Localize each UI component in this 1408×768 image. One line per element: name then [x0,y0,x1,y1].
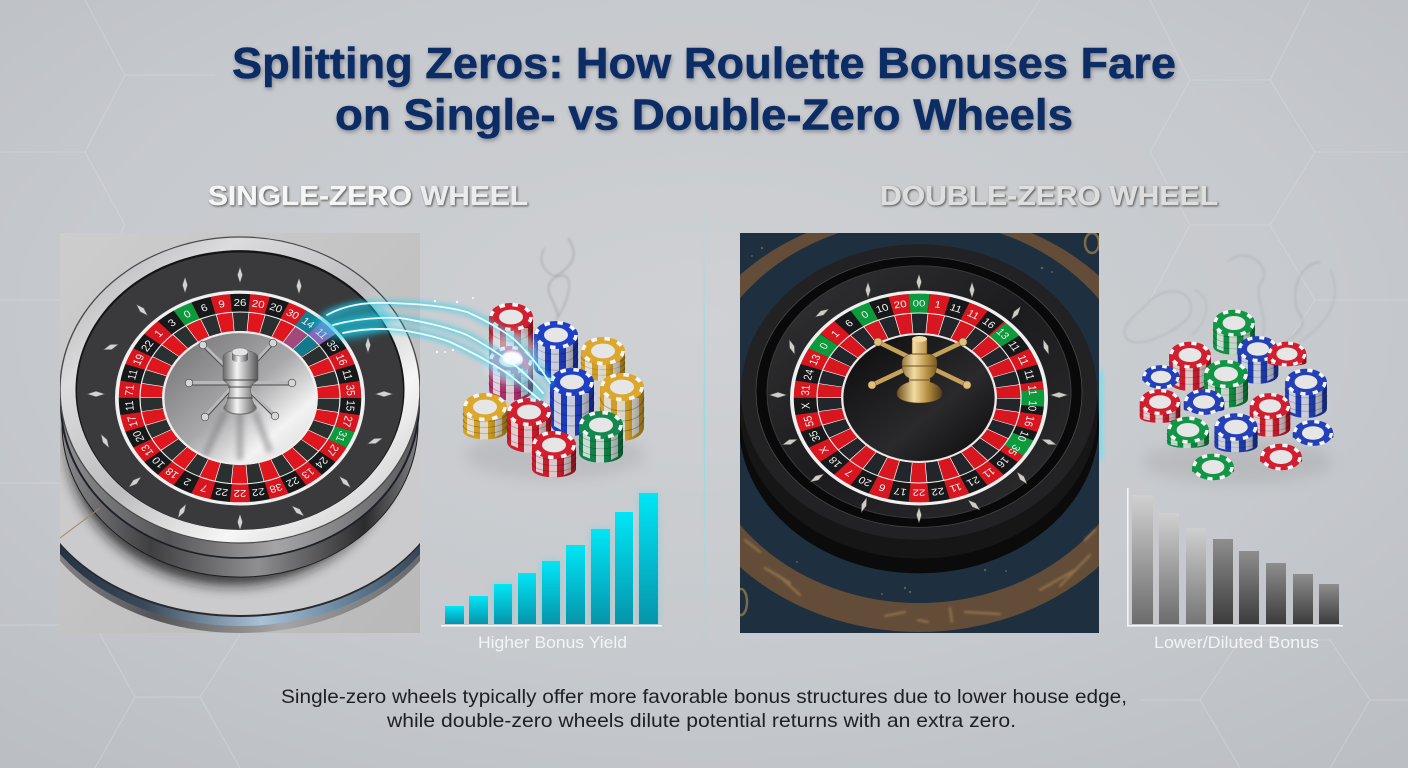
pocket numbers: 10 [874,302,891,316]
panel: double-zero roulette wheel [740,233,1099,633]
pocket numbers: 7 [843,466,856,478]
small brass rings [735,233,1099,615]
pocket numbers: 24 [801,368,817,381]
pocket numbers: 22 [234,487,246,498]
pocket numbers: X [817,444,832,455]
pocket numbers: 16 [332,353,349,367]
pocket numbers: 11 [1021,369,1037,381]
pocket numbers: 26 [234,298,246,309]
pocket numbers: 0 [817,341,832,352]
pocket numbers: 16 [993,454,1012,470]
pocket numbers: 10 [1025,400,1039,412]
pocket numbers: 11 [1025,385,1039,396]
title [232,39,1176,140]
center divider [704,195,705,650]
glowing energy arcs from wheel to chips [327,297,550,400]
pocket numbers: 3 [166,317,179,329]
bar chart: lower/diluted bonus [1127,488,1343,627]
heading: double-zero wheel: DOUBLE-ZERO WHEEL [880,180,1218,211]
pocket numbers: 35 [807,429,824,443]
chips: double-zero pile [1140,310,1333,484]
pocket numbers: 13 [139,442,157,458]
felt speckles [751,247,1053,595]
pocket numbers: 0 [182,308,193,321]
pocket numbers: 6 [877,481,887,493]
pocket numbers: 22 [912,487,925,498]
pocket numbers: 11 [980,465,997,480]
wooden ring [740,233,1099,632]
pocket numbers: 20 [251,298,266,311]
summary text: Single-zero wheels typically offer more favorable bonus structures due to lower house edge, [281,686,1127,708]
pocket numbers: 15 [343,400,357,412]
pocket numbers [123,298,357,498]
pocket numbers: 38 [268,481,284,495]
pocket numbers: 9 [218,299,226,310]
pocket numbers: 20 [268,301,284,315]
pocket numbers: 00 [913,298,926,309]
brass hub with spindle arms [868,336,971,403]
pocket numbers: 22 [251,485,266,498]
pocket numbers: 11 [312,326,330,341]
pocket numbers: 1 [933,299,942,311]
summary text: while double-zero wheels dilute potential returns with an extra zero. [386,710,1016,732]
cyan glow beside double-zero panel [1096,370,1103,460]
pocket numbers: 20 [893,299,908,311]
track diamonds [769,274,1068,523]
pocket numbers: 21 [964,474,982,488]
pocket numbers: 27 [339,415,355,428]
pocket numbers: 14 [299,315,317,331]
pocket numbers: 13 [993,327,1012,342]
pocket numbers: 16 [980,316,998,331]
pocket numbers: 1 [152,328,166,340]
cyan wash over wheel [312,300,392,344]
pocket numbers: 6 [843,318,856,329]
title: on Single- vs Double-Zero Wheels [335,90,1073,140]
pocket numbers: 35 [343,384,357,396]
pocket numbers: X [799,402,813,409]
wheel stacked steel layers [60,237,420,577]
pocket numbers: 17 [893,485,908,497]
pocket numbers: 2 [182,475,193,488]
pocket numbers: 0 [859,309,871,321]
pocket numbers: 1 [829,328,843,340]
pocket numbers: 13 [807,353,824,367]
heading: single-zero wheel: SINGLE-ZERO WHEEL [208,180,528,211]
pocket numbers: 18 [163,465,181,481]
panel: single-zero roulette wheel [60,233,420,633]
pocket numbers: 19 [131,353,148,367]
pocket numbers: 11 [339,368,355,381]
pocket numbers: 10 [150,454,168,470]
pocket numbers: 7 [199,482,209,494]
pocket numbers: 11 [1005,339,1023,354]
pocket rings [129,303,351,493]
pocket numbers: 71 [123,384,137,396]
pocket numbers: 31 [332,429,349,443]
bar chart: higher bonus yield [441,493,662,627]
pocket numbers: 13 [299,465,317,481]
pocket numbers: 20 [131,429,148,443]
title: Splitting Zeros: How Roulette Bonuses Fare [232,39,1176,88]
pocket numbers: 35 [1005,442,1023,457]
pocket numbers: 10 [1014,429,1031,443]
pocket numbers: 16 [1021,415,1037,428]
pocket numbers: 11 [123,400,137,411]
pocket numbers: 17 [125,415,141,428]
chart label: higher bonus yield: Higher Bonus Yield [478,634,627,652]
chrome hub with spindle arms [185,339,296,460]
pocket numbers: 27 [323,442,341,458]
pocket numbers: 11 [948,481,963,494]
pocket numbers: 55 [801,415,817,428]
pocket numbers: 24 [312,454,330,470]
summary text [281,686,1127,732]
pocket numbers: 22 [214,485,229,498]
pocket numbers: 20 [856,474,874,488]
smoke above single-zero chips [541,238,574,325]
pocket numbers [799,298,1039,498]
pocket numbers: 18 [826,454,845,469]
pocket numbers: 11 [948,302,964,316]
pocket numbers: 22 [930,485,945,497]
pocket numbers: 6 [199,302,209,314]
wheel base platform [60,412,420,633]
pocket numbers: 31 [799,384,813,396]
pocket numbers: 11 [1014,353,1031,367]
chips: single-zero pile [463,303,645,480]
pocket numbers: 22 [139,338,157,354]
track diamonds [87,267,393,530]
pocket numbers: 30 [284,307,301,322]
pocket numbers: 11 [125,368,141,381]
base wire [60,508,100,538]
pocket numbers: 35 [323,338,341,354]
pocket numbers: 11 [965,308,981,322]
pocket numbers: 22 [284,474,301,489]
smoke above double-zero chips [1125,255,1335,345]
chart label: lower/diluted bonus: Lower/Diluted Bonus [1154,634,1319,652]
